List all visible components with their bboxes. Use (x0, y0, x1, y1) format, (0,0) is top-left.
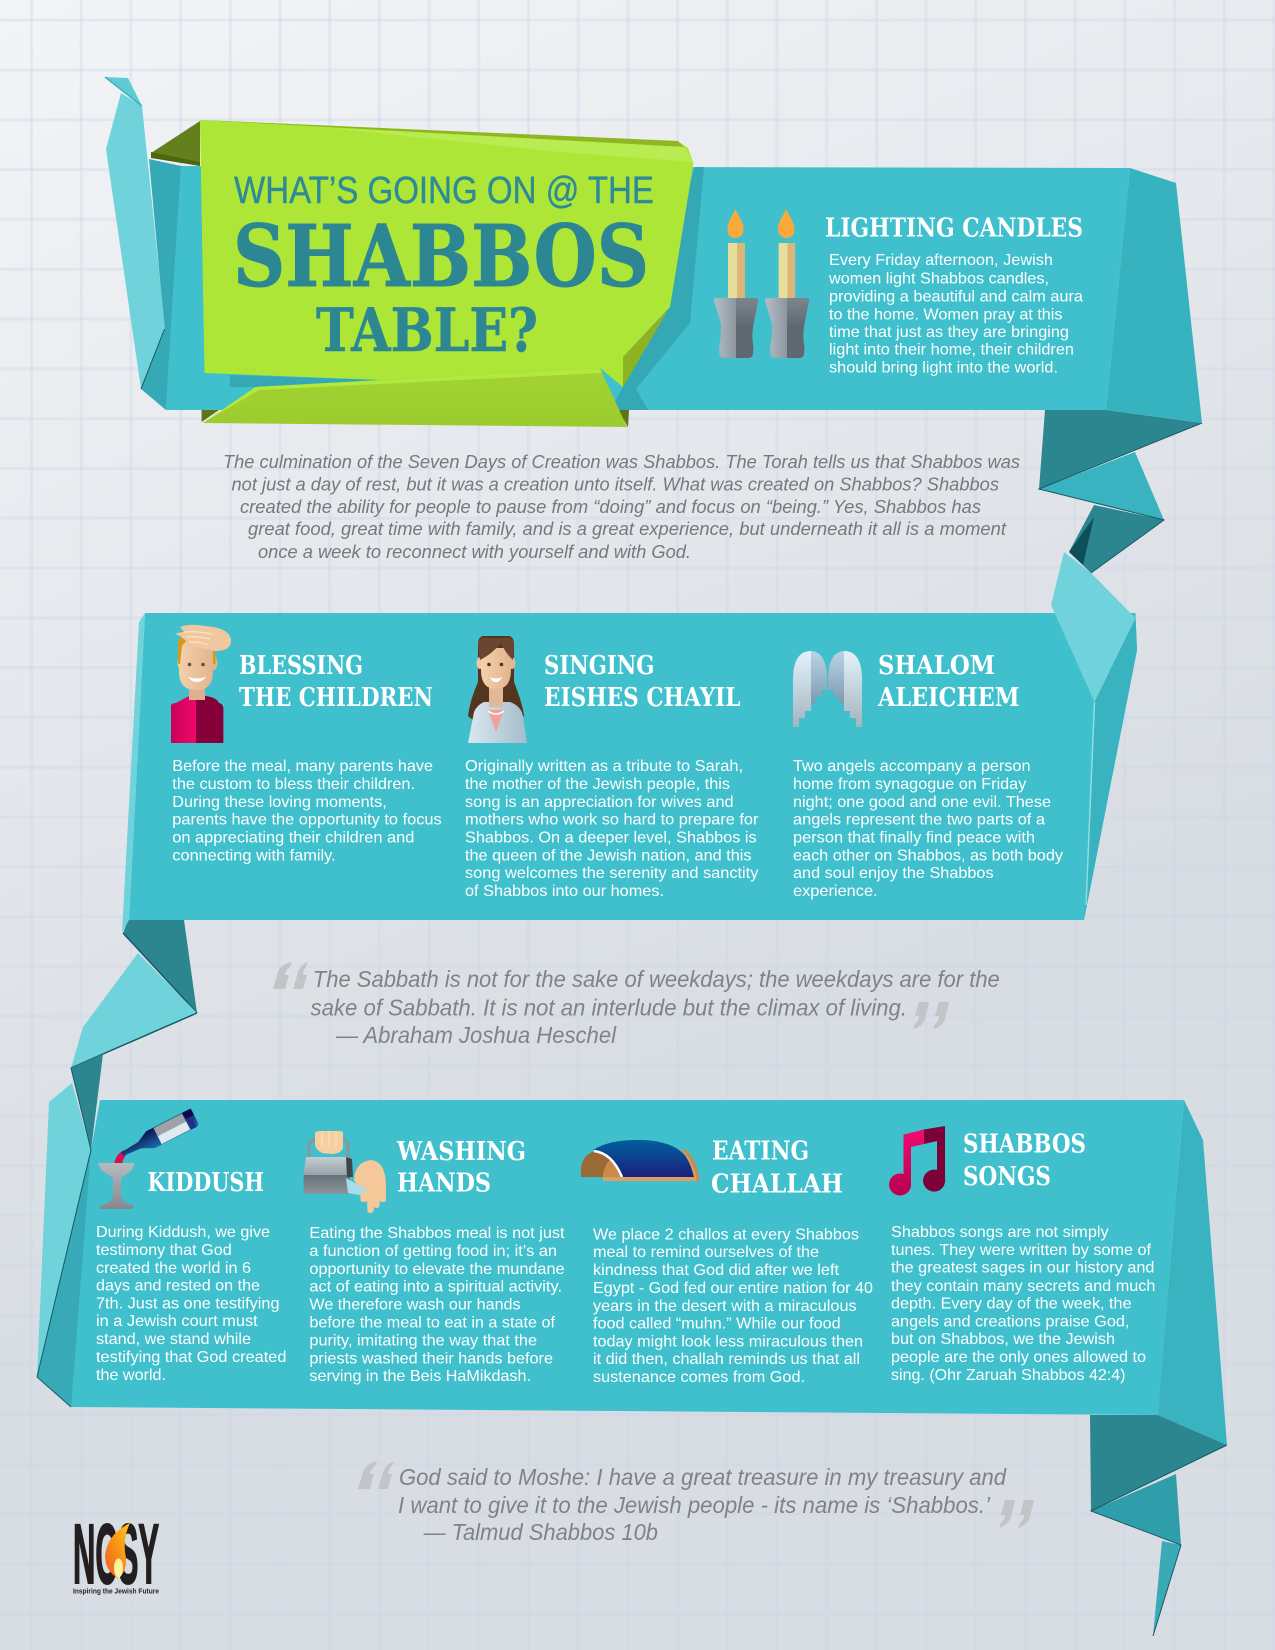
text: eating challah (593, 1226, 873, 1386)
logo: NCSY: Inspiring the Jewish Future (73, 1586, 159, 1596)
text: eating challah: meal to remind ourselves of the (593, 1244, 819, 1261)
text: singing eishes chayil: song is an appreciation for wives and (465, 794, 734, 811)
heading: singing eishes chayil: EISHES CHAYIL (544, 682, 741, 713)
text: blessing the children: on appreciating their children and (172, 830, 414, 846)
icon: woman (468, 636, 527, 743)
heading: shabbos songs: SHABBOS (963, 1128, 1086, 1160)
text: blessing the children (172, 758, 442, 864)
text: shabbos songs: angels and creations praise God, (891, 1313, 1129, 1330)
text: lighting candles: women light Shabbos candles, (828, 270, 1049, 287)
text: shabbos songs: the greatest sages in our history and (891, 1260, 1154, 1277)
heading: eating challah (711, 1136, 843, 1200)
text: washing hands (309, 1225, 565, 1385)
text: washing hands: before the meal to eat in a state of (309, 1314, 556, 1332)
text: shalom aleichem: night; one good and one evil. These (793, 794, 1051, 811)
heading: what's going on: WHAT’S GOING ON @ THE (234, 170, 654, 212)
quote: Heschel: The Sabbath is not for the sake of weekdays; the weekdays are for the (313, 966, 1000, 992)
icon: parent blessing child (171, 625, 231, 743)
heading: singing eishes chayil: SINGING (544, 650, 654, 681)
panel: bottom banner (37, 1054, 1227, 1445)
text: blessing the children: Before the meal, many parents have (172, 758, 433, 775)
text: washing hands: priests washed their hands before (309, 1350, 553, 1367)
text: kiddush: testifying that God created (96, 1349, 286, 1366)
text: shabbos songs: sing. (Ohr Zaruah Shabbos 42:4) (891, 1367, 1126, 1384)
text: lighting candles: light into their home, their children (829, 342, 1074, 358)
icon: music notes (889, 1126, 945, 1195)
logo: NCSY (73, 1507, 159, 1601)
text: singing eishes chayil: song welcomes the serenity and sanctity (465, 865, 758, 882)
text: singing eishes chayil: of Shabbos into our homes. (465, 883, 664, 900)
heading: shabbos songs (963, 1128, 1086, 1192)
text: blessing the children: parents have the opportunity to focus (172, 812, 442, 829)
text: singing eishes chayil: mothers who work so hard to prepare for (465, 812, 759, 829)
ribbon: left folds of bottom banner (37, 1054, 103, 1407)
heading: washing hands: HANDS (397, 1168, 491, 1199)
heading: lighting candles: LIGHTING CANDLES (825, 212, 1083, 244)
text: kiddush: created the world in 6 (96, 1260, 251, 1277)
quote: Heschel (273, 962, 1000, 1048)
text: eating challah: today might look less miraculous then (593, 1333, 863, 1350)
panel: middle banner (122, 613, 1137, 932)
text: shabbos songs (891, 1224, 1155, 1384)
heading: washing hands: WASHING (396, 1136, 526, 1167)
text: singing eishes chayil: the mother of the Jewish people, this (465, 776, 730, 793)
icon: challah (581, 1140, 700, 1181)
text: shabbos songs: people are the only ones allowed to (891, 1349, 1146, 1366)
text: kiddush: stand, we stand while (96, 1331, 251, 1348)
text: washing hands: Eating the Shabbos meal is not just (309, 1225, 565, 1242)
heading: blessing the children: THE CHILDREN (239, 682, 433, 713)
text: blessing the children: connecting with family. (172, 847, 336, 864)
text: lighting candles: time that just as they are bringing (829, 324, 1069, 341)
text: lighting candles (828, 252, 1083, 376)
text: washing hands: We therefore wash our hands (309, 1297, 521, 1314)
quote: Talmud Shabbos: I want to give it to the Jewish people - its name is ‘Shabbos.’ (398, 1492, 991, 1518)
text: singing eishes chayil: Originally written as a tribute to Sarah, (465, 758, 743, 775)
text: lighting candles: to the home. Women pray at this (829, 306, 1062, 323)
panel: top banner with lighting candles (166, 166, 1202, 423)
quote mark: closing (913, 1002, 949, 1029)
left tail of the ribbon (105, 77, 210, 410)
text: shabbos songs: Shabbos songs are not simply (891, 1224, 1109, 1241)
text: intro paragraph: great food, great time with family, and is a great experience, but underneath it all is a moment (248, 518, 1007, 539)
text: singing eishes chayil (465, 758, 759, 900)
text: shabbos songs: but on Shabbos, we the Jewish (891, 1331, 1115, 1348)
text: washing hands: a function of getting food in; it’s an (309, 1243, 557, 1260)
heading: blessing the children: BLESSING (239, 650, 363, 681)
text: kiddush: in a Jewish court must (96, 1313, 258, 1330)
icon: angel wings (793, 651, 862, 727)
text: kiddush (96, 1224, 286, 1384)
text: shalom aleichem: angels represent the two parts of a (793, 812, 1045, 829)
text: eating challah: sustenance comes from God. (593, 1369, 805, 1386)
text: shalom aleichem: and soul enjoy the Shabbos (793, 865, 994, 882)
text: blessing the children: During these loving moments, (172, 794, 387, 811)
text: shabbos songs: depth. Every day of the week, the (891, 1296, 1132, 1313)
text: kiddush: 7th. Just as one testifying (96, 1296, 280, 1312)
ribbon: fold under middle banner, upper left (71, 920, 197, 1068)
text: lighting candles: providing a beautiful and calm aura (829, 288, 1083, 306)
text: eating challah: We place 2 challos at every Shabbos (593, 1226, 859, 1243)
quote: Heschel: sake of Sabbath. It is not an interlude but the climax of living. (310, 995, 907, 1021)
text: intro paragraph: once a week to reconnect with yourself and with God. (258, 541, 691, 562)
text: eating challah: kindness that God did after we left (593, 1262, 840, 1279)
text: shabbos songs: tunes. They were written by some of (891, 1242, 1152, 1259)
heading: eating challah: CHALLAH (711, 1168, 843, 1200)
quote: Talmud Shabbos: God said to Moshe: I have a great treasure in my treasury and (399, 1464, 1007, 1490)
icon: wine bottle and cup (98, 1109, 199, 1209)
text: singing eishes chayil: Shabbos. On a deeper level, Shabbos is (465, 830, 757, 846)
text: blessing the children: the custom to bless their children. (172, 776, 415, 793)
text: singing eishes chayil: the queen of the Jewish nation, and this (465, 847, 752, 864)
text: intro paragraph (223, 451, 1020, 562)
heading: shalom aleichem: SHALOM (878, 650, 995, 681)
quote mark: opening (273, 962, 308, 989)
text: lighting candles: should bring light into the world. (829, 359, 1058, 376)
icon: two candles (714, 209, 809, 358)
text: kiddush: the world. (96, 1367, 166, 1384)
text: kiddush: days and rested on the (96, 1278, 260, 1295)
text: lighting candles: Every Friday afternoon, Jewish (829, 252, 1053, 269)
text: washing hands: act of eating into a spiritual activity. (309, 1279, 562, 1296)
text: shalom aleichem: Two angels accompany a person (793, 758, 1030, 775)
text: eating challah: years in the desert with a miraculous (593, 1298, 857, 1315)
text: NCSY (73, 1507, 159, 1601)
text: kiddush: testimony that God (96, 1242, 232, 1259)
text: intro paragraph: The culmination of the Seven Days of Creation was Shabbos. The Torah tells us that Shabbos was (223, 451, 1020, 472)
text: kiddush: During Kiddush, we give (96, 1224, 270, 1241)
heading: shalom aleichem: ALEICHEM (877, 682, 1020, 713)
title banner: green speech ribbon (105, 77, 694, 427)
quote: Talmud Shabbos (358, 1461, 1034, 1545)
text: washing hands: serving in the Beis HaMikdash. (309, 1368, 531, 1385)
ribbon: light fold entering middle banner (1051, 552, 1136, 702)
text: washing hands: opportunity to elevate the mundane (309, 1261, 565, 1278)
icon: pitcher washing hand (304, 1131, 386, 1213)
text: shalom aleichem: home from synagogue on Friday (793, 776, 1026, 793)
heading: shabbos songs: SONGS (963, 1161, 1051, 1192)
quote: Heschel: — Abraham Joshua Heschel (335, 1022, 617, 1048)
ribbon: folds after bottom banner (1090, 1415, 1227, 1636)
text: eating challah: Egypt - God fed our entire nation for 40 (593, 1280, 873, 1297)
text: washing hands: purity, imitating the way that the (309, 1332, 537, 1349)
quote mark: opening (358, 1461, 394, 1489)
text: intro paragraph: created the ability for people to pause from “doing” and focus on “being.” Yes, Shabbos has (240, 496, 981, 517)
text: shalom aleichem: each other on Shabbos, as both body (793, 847, 1063, 864)
text: shabbos songs: they contain many secrets and much (891, 1278, 1155, 1295)
text: shalom aleichem (793, 758, 1063, 900)
heading: singing eishes chayil (544, 650, 741, 713)
text: shalom aleichem: experience. (793, 883, 878, 900)
heading: table: TABLE? (316, 296, 538, 366)
text: eating challah: food called “muhn.” While our food (593, 1316, 841, 1333)
quote: Talmud Shabbos: — Talmud Shabbos 10b (423, 1519, 658, 1545)
heading: kiddush: KIDDUSH (148, 1167, 264, 1198)
heading: blessing the children (239, 650, 433, 713)
text: intro paragraph: not just a day of rest, but it was a creation unto itself. What was created on Shabbos? Shabbos (232, 474, 999, 494)
heading: shalom aleichem (877, 650, 1020, 713)
heading: shabbos: SHABBOS (233, 207, 649, 307)
quote mark: closing (999, 1500, 1034, 1528)
heading: washing hands (396, 1136, 526, 1199)
ribbon: folds between top and middle banners (1039, 410, 1202, 573)
text: shalom aleichem: person that finally find peace with (793, 830, 1035, 846)
text: eating challah: it did then, challah reminds us that all (593, 1351, 860, 1368)
heading: eating challah: EATING (712, 1136, 809, 1167)
